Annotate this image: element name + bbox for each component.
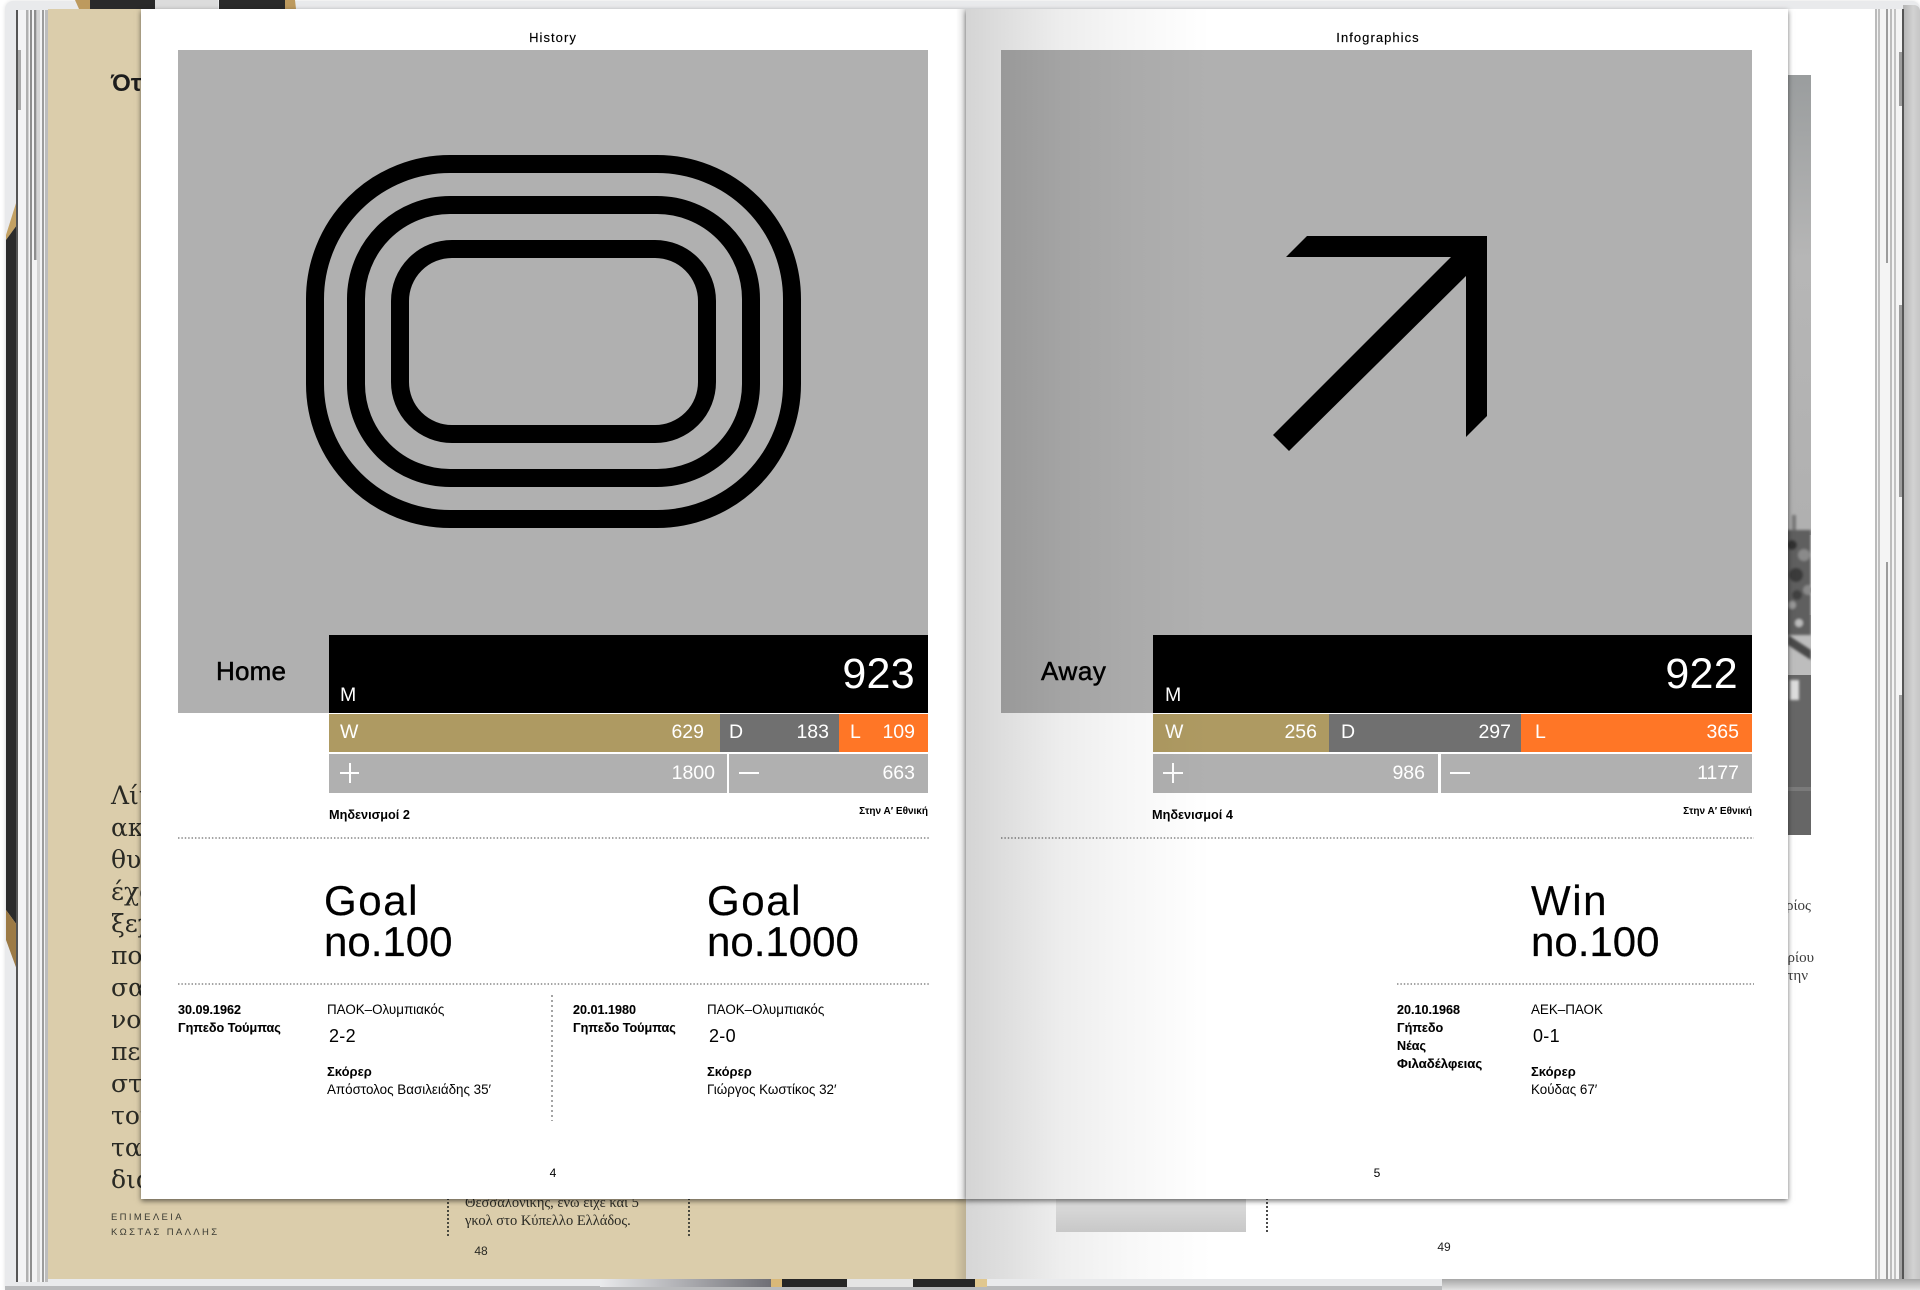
bar: matches 923: M — [340, 684, 356, 706]
editor credit: ΚΩΣΤΑΣ ΠΑΛΛΗΣ — [111, 1226, 219, 1238]
date and venue: goal 100: 30.09.1962 — [178, 1003, 241, 1017]
bar: goals against 663 — [729, 754, 928, 793]
scorer: goal 1000: Σκόρερ — [707, 1064, 752, 1079]
bar: draws 297: D — [1341, 721, 1355, 743]
heading: Goal no.100: no.100 — [324, 918, 452, 965]
label: Home: Home — [216, 656, 286, 686]
page heading: Infographics: Infographics — [1336, 30, 1420, 44]
panel: Infographics page — [966, 9, 1788, 1199]
stats block: away — [1153, 635, 1752, 793]
bar: goals against 1177 — [1441, 754, 1752, 793]
right cover shadow — [1903, 5, 1920, 1290]
background body text fragment: ακ — [111, 813, 144, 842]
panel: away grey block — [1001, 50, 1752, 713]
background text fragments: ρίου — [1788, 950, 1814, 966]
background body text fragment: ξεχ — [111, 909, 153, 938]
cover pattern: top — [75, 0, 296, 9]
background body text fragment: δια — [111, 1165, 153, 1194]
date and venue: goal 100: Γηπεδο Τούμπας — [178, 1021, 281, 1035]
background text fragments — [1764, 898, 1814, 1051]
scorer: goal 100: Σκόρερ — [327, 1064, 372, 1079]
date and venue: goal 1000: Γηπεδο Τούμπας — [573, 1021, 676, 1035]
heading: Win no.100: no.100 — [1531, 918, 1659, 965]
panel: beige left book page — [48, 9, 966, 1279]
score: goal 100: 2-2 — [329, 1026, 356, 1046]
right page edges — [1875, 9, 1904, 1279]
icon: stadium track — [306, 155, 801, 528]
background text fragments: ρίος — [1786, 898, 1811, 914]
date and venue: win 100: Γήπεδο — [1397, 1021, 1443, 1035]
bar: losses 109 — [839, 714, 928, 752]
bar: goals for 986 — [1153, 754, 1438, 793]
scorer: win 100: Σκόρερ — [1531, 1064, 1576, 1079]
editor credit: ΕΠΙΜΕΛΕΙΑ — [111, 1212, 184, 1223]
bar: matches 923 — [329, 635, 928, 713]
score: win 100: 0-1 — [1533, 1026, 1560, 1046]
background caption: Θεσσαλονίκης, ενώ είχε και 5 — [465, 1195, 639, 1211]
bar: wins 256: 256 — [1284, 721, 1317, 743]
date and venue: win 100: Νέας — [1397, 1039, 1426, 1053]
heading: Goal no.1000 — [707, 877, 859, 965]
panel: home grey block — [178, 50, 928, 713]
background heading fragment: Ότ — [111, 70, 142, 97]
background caption: γκολ στο Κύπελλο Ελλάδος. — [465, 1213, 631, 1229]
fixture: win 100: ΑΕΚ–ΠΑΟΚ — [1531, 1002, 1603, 1017]
note: clean sheets: Μηδενισμοί 2 — [329, 808, 410, 822]
fixture: goal 100: ΠΑΟΚ–Ολυμπιακός — [327, 1002, 444, 1017]
page number 4: 4 — [550, 1166, 556, 1180]
heading: Goal no.1000: no.1000 — [707, 918, 859, 965]
background body text fragment: πο — [111, 941, 142, 970]
bar: draws 183 — [720, 714, 839, 752]
date and venue: goal 100 — [178, 1003, 281, 1035]
stats block: home — [329, 635, 928, 793]
date and venue: win 100: 20.10.1968 — [1397, 1003, 1460, 1017]
background body text fragment: πε — [111, 1037, 140, 1066]
scorer: goal 100 — [327, 1064, 491, 1097]
bar: matches 922: 922 — [1665, 650, 1738, 698]
bar: wins 629: W — [340, 721, 358, 743]
background body text fragment — [110, 781, 157, 1194]
icon: away arrow — [1273, 236, 1487, 451]
bar: goals for 1800: 1800 — [672, 762, 715, 784]
bar: draws 297: 297 — [1478, 721, 1511, 743]
date and venue: win 100 — [1397, 1003, 1482, 1071]
background photo fragment — [1056, 1194, 1246, 1232]
scorer: win 100 — [1531, 1064, 1597, 1097]
bar: goals for 986: 986 — [1392, 762, 1425, 784]
bar: goals for 1800 — [329, 754, 727, 793]
scorer: goal 100: Απόστολος Βασιλειάδης 35′ — [327, 1082, 491, 1097]
date and venue: win 100: Φιλαδέλφειας — [1397, 1056, 1482, 1071]
panel: white right book page — [966, 9, 1875, 1279]
bar: matches 923: 923 — [842, 650, 915, 698]
editor credit — [111, 1212, 219, 1238]
scorer: goal 1000 — [707, 1064, 836, 1097]
cover pattern: bottom — [600, 1279, 987, 1287]
background body text fragment: έχο — [111, 877, 154, 906]
heading: Win no.100: Win — [1531, 877, 1608, 924]
bar: losses 365: 365 — [1706, 721, 1739, 743]
bottom right cover shadow — [1442, 1279, 1920, 1290]
bar: draws 183: 183 — [796, 721, 829, 743]
bar: draws 183: D — [729, 721, 743, 743]
bottom cover edge — [5, 1286, 1442, 1290]
left page edges — [16, 10, 48, 1282]
note: clean sheets: Μηδενισμοί 4 — [1152, 808, 1233, 822]
heading: Win no.100 — [1531, 877, 1659, 965]
bar: wins 629: 629 — [671, 721, 704, 743]
heading: Goal no.1000: Goal — [707, 877, 802, 924]
bar: losses 365: L — [1535, 721, 1546, 743]
bar: goals against 1177: 1177 — [1697, 762, 1739, 784]
bar: draws 297 — [1329, 714, 1521, 752]
background body text fragment: θυ — [111, 845, 141, 874]
heading: Goal no.100 — [324, 877, 452, 965]
date and venue: goal 1000: 20.01.1980 — [573, 1003, 636, 1017]
background text fragments: ; — [1766, 1003, 1770, 1019]
background body text fragment: του — [111, 1101, 155, 1130]
background body text fragment: Λίγ — [111, 781, 154, 810]
page number 5: 5 — [1374, 1166, 1380, 1180]
bar: matches 922 — [1153, 635, 1752, 713]
note: top division: Στην Α′ Εθνική — [859, 806, 928, 817]
bar: wins 629 — [329, 714, 720, 752]
background caption — [465, 1195, 639, 1229]
bar: matches 922: M — [1165, 684, 1181, 706]
background body text fragment: σα — [111, 973, 145, 1002]
bar: losses 365 — [1521, 714, 1752, 752]
bar: losses 109: L — [850, 721, 861, 743]
date and venue: goal 1000 — [573, 1003, 676, 1035]
background body text fragment: στο — [111, 1069, 157, 1098]
bar: goals against 663: 663 — [882, 762, 915, 784]
background text fragments: ε — [1764, 1035, 1770, 1051]
background body text fragment: νο — [111, 1005, 141, 1034]
page heading: History: History — [529, 30, 577, 44]
cover pattern: left — [6, 204, 16, 967]
bar: wins 256 — [1153, 714, 1329, 752]
bar: losses 109: 109 — [882, 721, 915, 743]
label: Away: Away — [1041, 656, 1107, 686]
note: top division: Στην Α′ Εθνική — [1683, 806, 1752, 817]
page number 48: 48 — [474, 1244, 488, 1258]
page number 49: 49 — [1437, 1240, 1451, 1254]
scorer: goal 1000: Γιώργος Κωστίκος 32′ — [707, 1082, 836, 1097]
fixture: goal 1000: ΠΑΟΚ–Ολυμπιακός — [707, 1002, 824, 1017]
scorer: win 100: Κούδας 67′ — [1531, 1082, 1597, 1097]
score: goal 1000: 2-0 — [709, 1026, 736, 1046]
background text fragments: την — [1787, 968, 1808, 984]
background stadium photo strip — [1788, 75, 1811, 835]
panel: History page — [141, 9, 966, 1199]
heading: Goal no.100: Goal — [324, 877, 419, 924]
background body text fragment: τα — [111, 1133, 142, 1162]
bar: wins 256: W — [1165, 721, 1183, 743]
